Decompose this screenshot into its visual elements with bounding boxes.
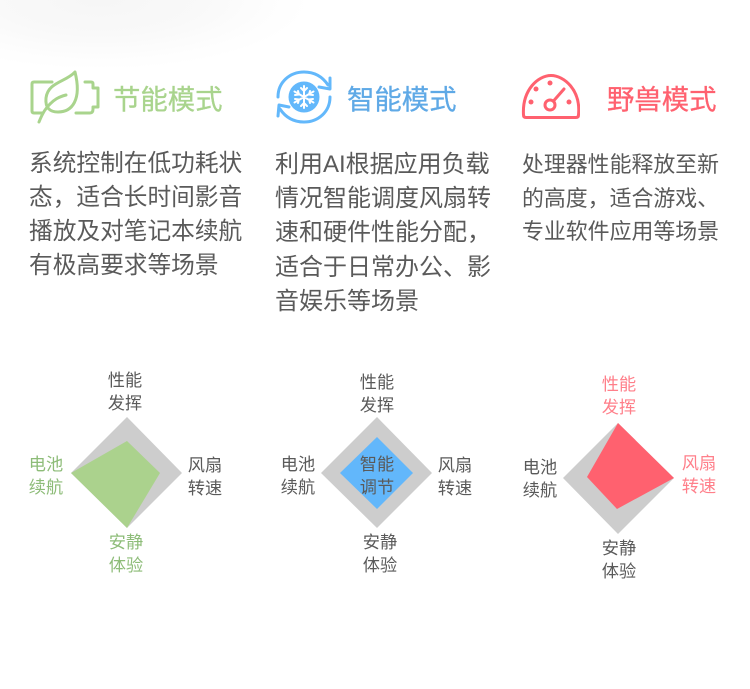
text block: 节能模式 description: 系统控制在低功耗状: [29, 151, 242, 177]
text block: 智能模式 description: 适合于日常办公、影: [275, 254, 491, 281]
label group: 智能模式 chart labels: 体验: [363, 555, 397, 575]
label group: 智能模式 chart labels: 安静: [363, 532, 397, 552]
heading: 野兽模式: 野兽模式: [607, 84, 717, 115]
label group: 智能模式 chart labels: 性能: [360, 372, 394, 392]
label group: 智能模式 chart labels: 智能: [360, 454, 394, 474]
label group: 野兽模式 chart labels: 续航: [523, 480, 557, 500]
label group: 节能模式 chart labels: 体验: [109, 555, 143, 575]
label group: 野兽模式 chart labels: 安静: [602, 538, 636, 558]
heading: 智能模式: 智能模式: [347, 84, 457, 115]
text block: 智能模式 description: 音娱乐等场景: [275, 288, 419, 315]
label group: 野兽模式 chart labels: 性能: [602, 374, 636, 394]
label group: 野兽模式 chart labels: 转速: [682, 476, 716, 496]
radar chart: 智能模式: [321, 417, 432, 528]
label group: 节能模式 chart labels: 安静: [109, 532, 143, 552]
label group: 智能模式 chart labels: [281, 372, 472, 575]
label group: 野兽模式 chart labels: [523, 374, 716, 581]
label group: 节能模式 chart labels: 转速: [188, 478, 222, 498]
label group: 节能模式 chart labels: 风扇: [188, 455, 222, 475]
heading: 节能模式: 节能模式: [113, 84, 223, 115]
text block: 节能模式 description: 有极高要求等场景: [29, 253, 219, 279]
label group: 节能模式 chart labels: 电池: [29, 454, 63, 474]
label group: 节能模式 chart labels: 性能: [108, 370, 142, 390]
text block: 智能模式 description: 速和硬件性能分配，: [275, 219, 491, 246]
label group: 智能模式 chart labels: 续航: [281, 477, 315, 497]
label group: 智能模式 chart labels: 调节: [360, 477, 394, 497]
text block: 节能模式 description: [29, 150, 242, 279]
label group: 智能模式 chart labels: 电池: [281, 454, 315, 474]
icon: battery with leaf: [30, 70, 100, 124]
radar chart: 野兽模式: [563, 423, 674, 534]
text block: 智能模式 description: 利用AI根据应用负载: [275, 151, 490, 178]
text block: 野兽模式 description: 的高度，适合游戏、: [522, 186, 719, 211]
label group: 节能模式 chart labels: [29, 370, 222, 575]
icon: snowflake with circular arrows: [276, 70, 332, 124]
label group: 节能模式 chart labels: 发挥: [108, 393, 142, 413]
icon: speedometer: [522, 74, 580, 119]
label group: 智能模式 chart labels: 风扇: [438, 455, 472, 475]
label group: 野兽模式 chart labels: 发挥: [602, 397, 636, 417]
text block: 智能模式 description: [275, 151, 491, 315]
label group: 智能模式 chart labels: 转速: [438, 478, 472, 498]
text block: 野兽模式 description: 专业软件应用等场景: [522, 219, 719, 244]
text block: 节能模式 description: 播放及对笔记本续航: [29, 219, 242, 245]
label group: 野兽模式 chart labels: 体验: [602, 561, 636, 581]
label group: 野兽模式 chart labels: 风扇: [682, 453, 716, 473]
text block: 节能模式 description: 态，适合长时间影音: [29, 185, 242, 211]
label group: 节能模式 chart labels: 续航: [29, 477, 63, 497]
radar chart: 节能模式: [71, 417, 182, 528]
label group: 智能模式 chart labels: 发挥: [360, 395, 394, 415]
text block: 野兽模式 description: 处理器性能释放至新: [522, 152, 719, 177]
text block: 野兽模式 description: [522, 152, 719, 244]
text block: 智能模式 description: 情况智能调度风扇转: [275, 185, 491, 212]
label group: 野兽模式 chart labels: 电池: [523, 457, 557, 477]
